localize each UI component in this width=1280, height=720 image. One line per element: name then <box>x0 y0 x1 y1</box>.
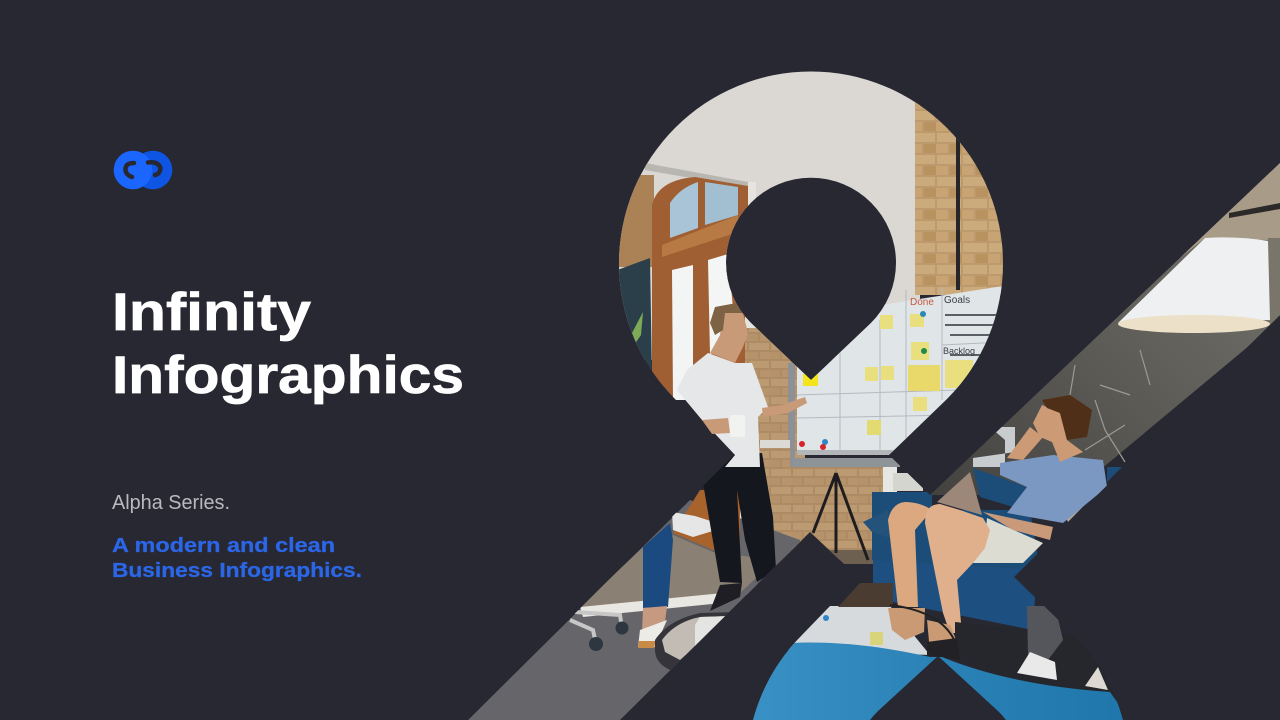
reflected note <box>870 632 883 645</box>
seated man shirt <box>1000 455 1107 523</box>
ankle <box>642 606 667 632</box>
laptop <box>937 472 982 515</box>
left brick and chalkboard <box>619 175 654 370</box>
photo: office scene clipped to infinity pin shape <box>468 60 1280 720</box>
shirt <box>677 353 768 467</box>
wooden planter <box>673 490 740 550</box>
tagline: Business Infographics. <box>112 559 362 582</box>
wall <box>600 60 920 360</box>
shoes <box>710 583 742 611</box>
concrete wall <box>930 160 1280 495</box>
couch <box>863 467 1122 630</box>
hair <box>710 302 743 335</box>
jeans <box>643 523 673 608</box>
pants <box>703 453 776 583</box>
lap arm <box>983 512 1053 540</box>
white sneaker <box>1017 652 1057 680</box>
lower brick and tripod <box>740 448 923 595</box>
head <box>710 313 748 363</box>
whiteboard: Done <box>910 297 934 308</box>
lower sneaker <box>638 620 667 648</box>
seated man hair <box>1042 395 1092 440</box>
wall strip by sofa <box>973 427 1015 467</box>
whiteboard <box>760 286 1003 550</box>
blue magnet reflection <box>823 615 829 621</box>
mug <box>730 415 745 437</box>
upper right wall <box>1180 160 1280 258</box>
sneaker <box>672 512 712 537</box>
seated man forearm up <box>1007 427 1043 460</box>
trouser of other person <box>1027 606 1063 660</box>
window frame <box>645 163 758 400</box>
left leg <box>888 502 932 607</box>
reflection on table <box>785 606 930 655</box>
presenter <box>677 302 807 611</box>
title: Infinity <box>112 283 312 342</box>
concrete scratches <box>1070 350 1150 462</box>
brown floor <box>838 583 893 607</box>
series label: Alpha Series. <box>112 492 230 514</box>
title <box>112 283 464 405</box>
right leg <box>925 504 990 633</box>
logo: infinity <box>114 151 172 189</box>
floor <box>468 500 800 720</box>
whiteboard: Goals <box>944 295 970 306</box>
brick wall right <box>915 102 1003 295</box>
tagline <box>112 534 362 582</box>
title: Infographics <box>112 346 464 405</box>
whiteboard: Backlog <box>943 346 975 356</box>
seated man head <box>1033 405 1083 462</box>
left table <box>655 612 735 672</box>
hand <box>702 418 730 434</box>
shorts <box>973 518 1043 563</box>
black pipe <box>956 135 960 290</box>
table rim <box>890 605 958 650</box>
second laptop <box>1067 506 1084 522</box>
far shoe <box>1085 667 1108 690</box>
carpet <box>955 622 1125 720</box>
brick behind presenter <box>745 328 805 553</box>
blue pouf <box>740 643 1130 720</box>
tagline: A modern and clean <box>112 534 335 557</box>
arm <box>762 397 807 417</box>
chair castor <box>570 612 628 651</box>
table reflected legs <box>888 608 960 660</box>
lamp <box>1118 237 1270 333</box>
